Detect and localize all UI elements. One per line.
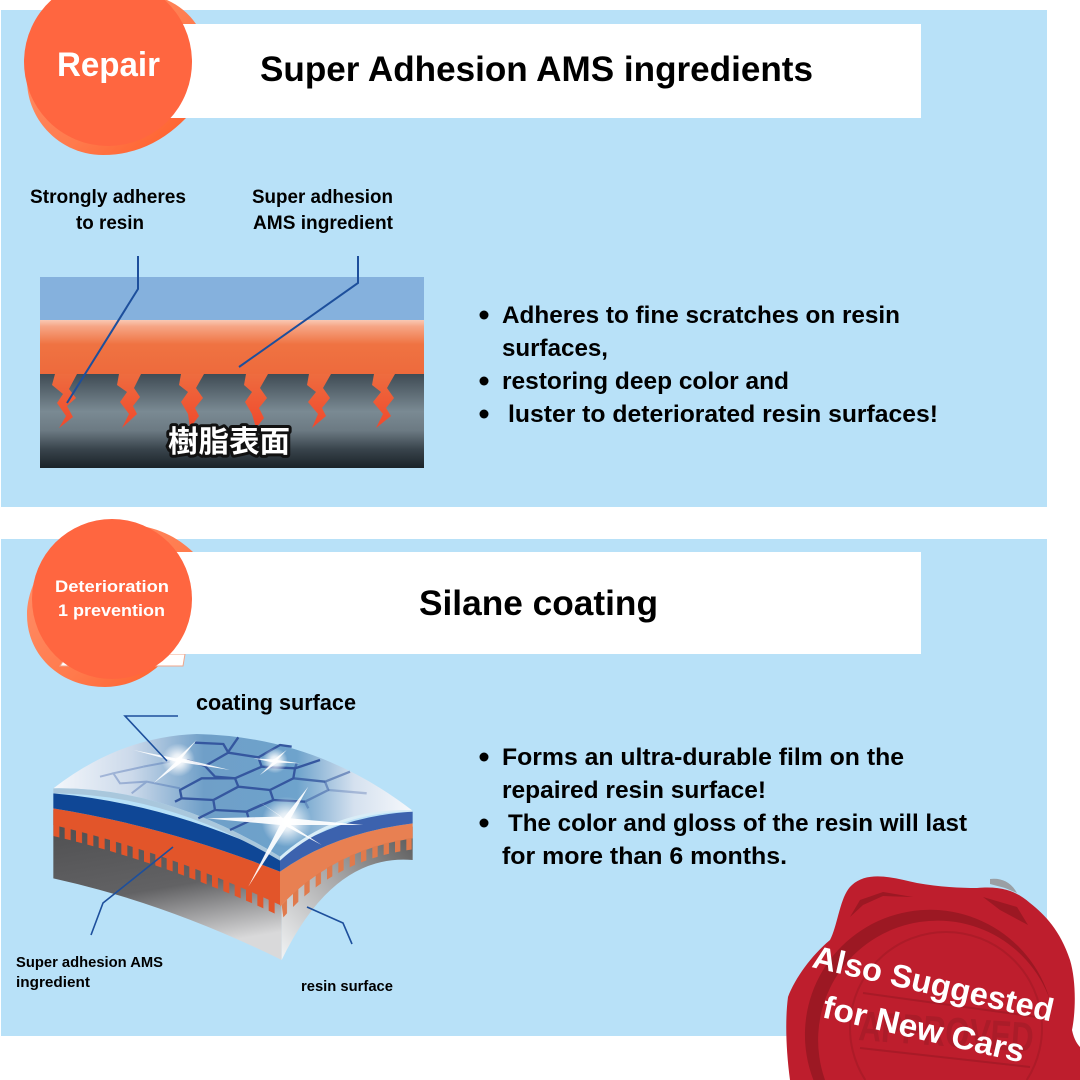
text block: coating bullets: repaired resin surface!	[502, 777, 766, 804]
heading bar: Super Adhesion AMS ingredients: Super Adhesion AMS ingredients	[260, 50, 813, 89]
badge: Deterioration 1 prevention: 1 prevention	[58, 601, 165, 620]
label: strongly adheres to resin: to resin	[76, 213, 144, 234]
diagram: curved coating cross-section	[53, 734, 413, 960]
text block: coating bullets: Forms an ultra-durable film on the	[502, 744, 904, 771]
label: strongly adheres to resin	[30, 187, 186, 234]
label: super adhesion AMS ingredient: Super adhesion AMS	[16, 955, 163, 971]
text block: repair bullets: restoring deep color and	[502, 368, 789, 395]
wax seal: also suggested for new cars: Also Suggested	[809, 939, 1057, 1028]
tab behind badge	[60, 654, 185, 666]
badge: Repair	[24, 0, 192, 146]
heading bar: Super Adhesion AMS ingredients	[160, 24, 921, 118]
text block: repair bullets: luster to deteriorated resin surfaces!	[508, 401, 938, 428]
heading bar: Silane coating	[160, 552, 921, 654]
label: super adhesion AMS ingredient: ingredient	[16, 975, 90, 991]
label: resin surface: resin surface	[301, 979, 393, 995]
wax seal: also suggested for new cars	[786, 876, 1080, 1080]
text block: coating bullets: The color and gloss of the resin will last	[508, 810, 967, 837]
label: super adhesion AMS ingredient	[16, 955, 163, 991]
badge: Deterioration 1 prevention: Deterioration	[55, 577, 169, 596]
leader lines: repair diagram	[67, 256, 358, 403]
badge shadow: deterioration prevention	[27, 525, 193, 687]
heading bar: Silane coating: Silane coating	[419, 584, 658, 623]
text block: repair bullets	[480, 302, 938, 428]
text block: repair bullets: Adheres to fine scratches on resin	[502, 302, 900, 329]
label: super adhesion AMS ingredient: Super adhesion	[252, 187, 393, 208]
label: super adhesion AMS ingredient: AMS ingredient	[253, 213, 394, 234]
label: super adhesion AMS ingredient	[252, 187, 394, 234]
badge shadow: repair	[27, 0, 196, 155]
label: strongly adheres to resin: Strongly adheres	[30, 187, 186, 208]
wax seal: also suggested for new cars: for New Cars	[819, 989, 1028, 1069]
label: coating surface: coating surface	[196, 690, 356, 715]
text block: repair bullets: surfaces,	[502, 335, 608, 362]
panel: repair	[1, 0, 1047, 507]
text block: coating bullets	[480, 744, 967, 870]
text block: coating bullets: for more than 6 months.	[502, 843, 787, 870]
panel: deterioration prevention	[1, 519, 1047, 1036]
leader lines: coating diagram	[91, 716, 352, 944]
badge: Repair: Repair	[57, 46, 160, 84]
badge: Deterioration 1 prevention	[32, 519, 192, 679]
diagram: resin surface layers	[40, 277, 424, 468]
diagram: resin surface layers: 樹脂表面	[168, 426, 290, 459]
